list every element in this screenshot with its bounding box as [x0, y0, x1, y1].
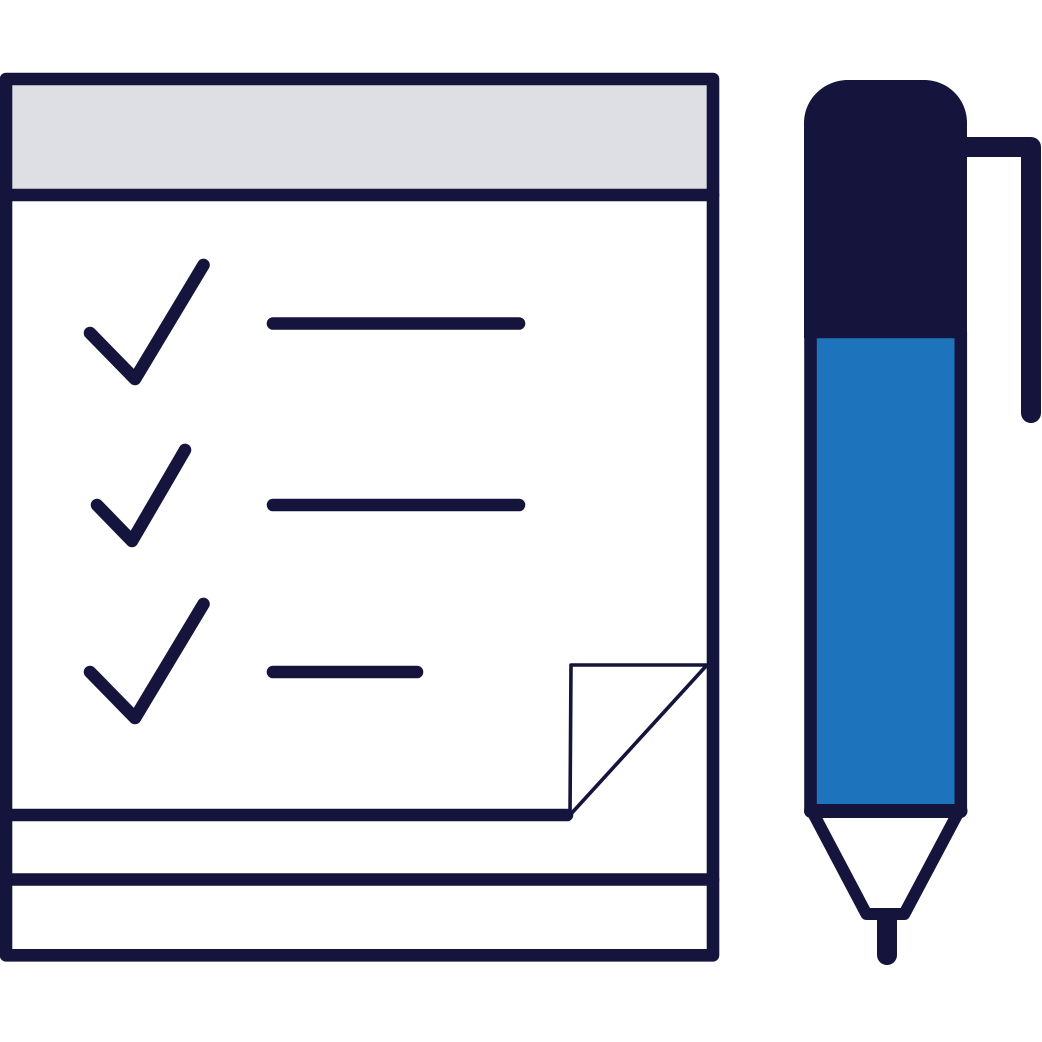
pen clip [967, 147, 1031, 413]
pen tip [812, 811, 959, 914]
pen ferrule bar [811, 804, 960, 818]
notepad [6, 79, 713, 955]
bottom sheet lines [6, 809, 567, 821]
pen barrel [810, 332, 961, 811]
checklist row 1 [90, 265, 519, 379]
notepad header band [6, 79, 713, 195]
page curl [570, 665, 707, 815]
pen cap [804, 80, 967, 338]
pen point [877, 914, 897, 965]
checklist row 2 [97, 450, 519, 541]
notepad body outline [6, 195, 713, 955]
checklist row 3 [90, 604, 417, 718]
pen [804, 80, 1031, 965]
